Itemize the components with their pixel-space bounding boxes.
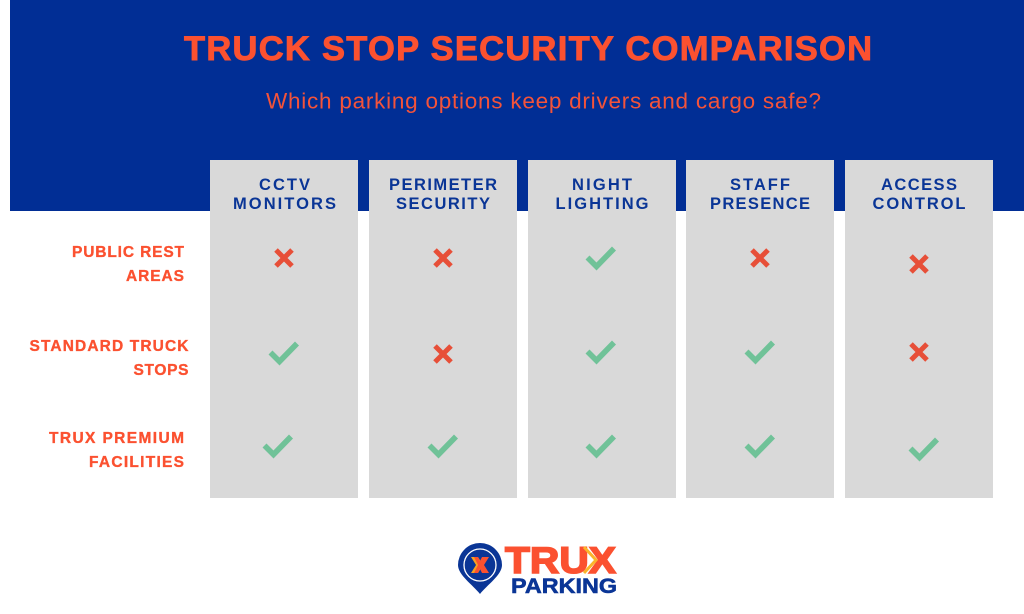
column: staff presence: PRESENCE	[710, 195, 810, 213]
column: perimeter security: PERIMETER	[389, 176, 497, 194]
subtitle: Which parking options keep drivers and cargo safe?	[266, 89, 821, 114]
column: CCTV monitors	[210, 160, 358, 498]
icon: check	[746, 342, 773, 360]
icon: check	[588, 248, 614, 266]
wordmark chevron	[584, 547, 596, 573]
column: night lighting	[528, 160, 676, 498]
row label: public rest areas: AREAS	[126, 268, 184, 285]
row label: trux premium facilities: FACILITIES	[89, 454, 184, 471]
column: CCTV monitors: MONITORS	[233, 195, 336, 213]
icon: check	[430, 436, 456, 454]
icon: check	[588, 342, 614, 360]
row label: standard truck stops: STOPS	[134, 362, 188, 379]
column: staff presence: STAFF	[730, 176, 790, 194]
column: night lighting: LIGHTING	[556, 195, 648, 213]
row label: trux premium facilities	[49, 430, 184, 471]
column: access control: ACCESS	[881, 176, 957, 194]
row label: trux premium facilities: TRUX PREMIUM	[49, 430, 184, 447]
icon: check	[746, 436, 773, 454]
column: perimeter security	[369, 160, 517, 498]
row label: standard truck stops: STANDARD TRUCK	[30, 338, 189, 355]
icon: cross	[435, 250, 451, 266]
icon: cross	[276, 250, 292, 266]
icon: cross	[435, 346, 451, 362]
icon: cross	[911, 344, 927, 360]
column: CCTV monitors: CCTV	[259, 176, 310, 194]
logo: Trux Parking	[458, 540, 617, 598]
icon: cross	[911, 256, 927, 272]
column: access control: CONTROL	[872, 195, 966, 213]
row label: public rest areas	[72, 244, 185, 285]
column: night lighting: NIGHT	[572, 176, 632, 194]
icon: location pin	[458, 543, 502, 594]
icon: check	[910, 440, 937, 458]
icon: check	[270, 344, 297, 362]
column: perimeter security: SECURITY	[396, 195, 490, 213]
header band	[10, 0, 1024, 211]
column: access control	[845, 160, 993, 498]
logo: Trux Parking: PARKING	[511, 574, 617, 598]
column: staff presence	[686, 160, 834, 498]
wordmark: TRUX	[505, 540, 616, 581]
row label: standard truck stops	[30, 338, 189, 379]
icon: check	[264, 436, 291, 454]
icon: cross	[752, 250, 768, 266]
title: TRUCK STOP SECURITY COMPARISON	[184, 30, 872, 68]
row label: public rest areas: PUBLIC REST	[72, 244, 185, 261]
icon: check	[588, 436, 614, 454]
